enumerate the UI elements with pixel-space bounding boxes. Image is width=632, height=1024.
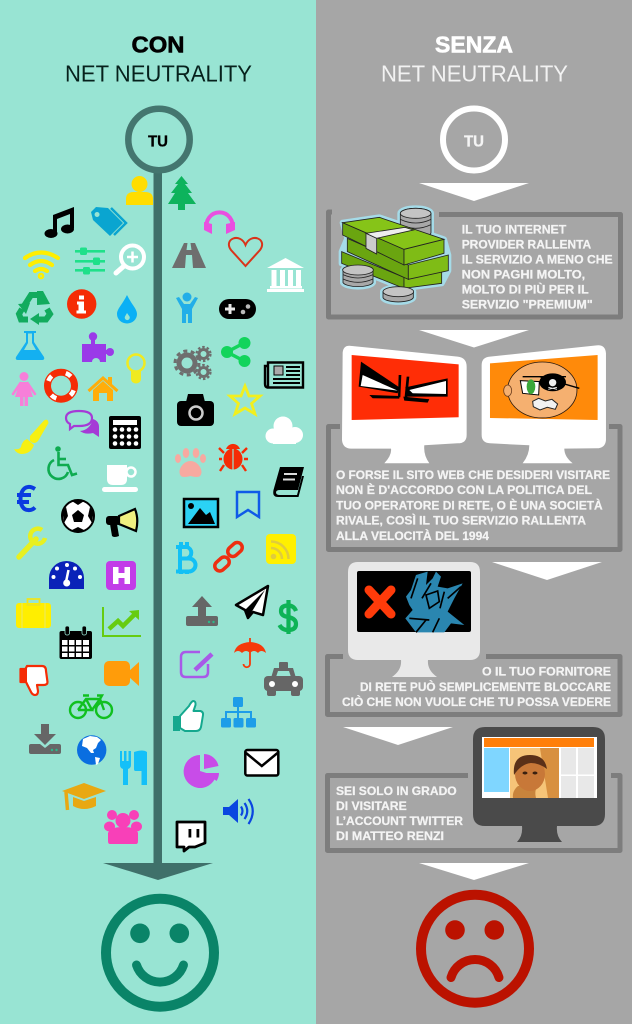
text: site disagrees: TUO OPERATORE DI RETE, O È UNA SOCIETÀ	[336, 497, 603, 512]
node: tu: TU	[464, 134, 484, 151]
arrow	[419, 863, 529, 880]
icon: flask	[16, 331, 44, 360]
icon: star	[230, 386, 260, 414]
icon: light bulb	[128, 354, 144, 384]
icon: lifebuoy	[44, 368, 78, 403]
icon: paintbrush	[14, 420, 48, 454]
text: matteo renzi: L’ACCOUNT TWITTER	[336, 814, 463, 828]
text: premium service: SERVIZIO "PREMIUM"	[462, 297, 593, 311]
icon: speaker	[223, 799, 253, 824]
icon: soccer ball	[62, 500, 94, 533]
icon: bitcoin	[176, 542, 196, 574]
text: matteo renzi: DI MATTEO RENZI	[336, 829, 444, 843]
text: blocked content: CIÒ CHE NON VUOLE CHE TU POSSA VEDERE	[342, 694, 611, 709]
text: matteo renzi: SEI SOLO IN GRADO	[336, 784, 457, 798]
icon: cutlery	[120, 750, 147, 785]
text: matteo renzi: DI VISITARE	[336, 799, 407, 813]
icon: calendar	[60, 626, 92, 659]
icon: growth chart	[103, 607, 141, 636]
icon: thumbs up	[173, 701, 203, 731]
icon: thumbs down	[20, 666, 48, 695]
node: tu: TU	[148, 134, 168, 151]
icon: bookmark	[237, 492, 259, 517]
text: site disagrees	[336, 468, 610, 543]
text: premium service: IL SERVIZIO A MENO CHE	[462, 252, 613, 266]
icon: euro	[17, 487, 35, 510]
icon: smiley face	[106, 899, 214, 1007]
icon: newspaper	[265, 362, 303, 388]
icon: bicycle	[70, 696, 112, 718]
node: tu	[443, 108, 505, 170]
icon: bank	[267, 258, 304, 292]
text: blocked content: DI RETE PUÒ SEMPLICEMENTE BLOCCARE	[360, 679, 611, 694]
icon: recycle	[18, 291, 50, 325]
illustration: twitter monitor	[473, 727, 605, 842]
arrow	[419, 330, 529, 348]
card: blocked content	[328, 562, 620, 714]
icon: wrench	[19, 529, 45, 557]
icon: book	[273, 467, 304, 497]
icon: speed gauge	[49, 561, 84, 589]
arrow	[419, 183, 529, 201]
photo: face	[510, 748, 559, 798]
text: site disagrees: NON È D'ACCORDO CON LA POLITICA DEL	[336, 482, 592, 497]
icon: road	[172, 243, 206, 268]
text: blocked content: O IL TUO FORNITORE	[482, 665, 611, 679]
icon: envelope	[245, 750, 278, 776]
heading: net neutrality: NET NEUTRALITY	[381, 61, 568, 87]
icon: coffee cup	[102, 465, 138, 492]
icon: taxi	[264, 662, 303, 696]
icon: calculator	[109, 416, 141, 449]
icon: sad face	[421, 895, 529, 1003]
illustration: pirate ship	[405, 572, 464, 632]
arrow	[492, 562, 602, 580]
icon: wheelchair	[48, 446, 77, 479]
illustration: blocked site monitor	[348, 562, 480, 677]
icon: person arms up	[176, 292, 198, 323]
heading: con: CON	[132, 32, 184, 58]
illustration: money stacks	[342, 208, 448, 302]
icon: sitemap	[221, 697, 256, 728]
icon: camera	[177, 394, 214, 426]
icon: woman	[13, 372, 35, 406]
icon: search plus	[116, 246, 144, 273]
icon: tree	[168, 176, 196, 210]
icon: umbrella	[234, 638, 266, 667]
icon: twitch	[177, 822, 205, 851]
text: premium service: MOLTO DI PIÙ PER IL	[462, 281, 589, 296]
card: site disagrees	[328, 345, 620, 550]
icon: bug	[219, 444, 248, 471]
heading: net neutrality: NET NEUTRALITY	[65, 61, 252, 87]
icon: rss	[266, 534, 296, 564]
icon: edit	[181, 652, 212, 677]
icon: gamepad	[219, 299, 256, 319]
panel: con net neutrality	[0, 0, 316, 1024]
icon: people	[104, 810, 142, 844]
text: site disagrees: ALLA VELOCITÀ DEL 1994	[336, 528, 489, 543]
icon: upload	[186, 596, 218, 626]
illustration: angry monitor	[342, 346, 467, 463]
icon: headphones	[204, 212, 235, 234]
icon: gears	[175, 347, 210, 379]
icon: video camera	[104, 661, 139, 686]
icon: globe	[77, 735, 106, 765]
text: premium service: IL TUO INTERNET	[462, 222, 567, 236]
illustration: pirate monitor	[482, 345, 606, 463]
text: matteo renzi	[336, 784, 463, 843]
icon: image	[184, 499, 218, 527]
icon: music	[44, 207, 74, 238]
text: premium service	[462, 222, 613, 311]
icon: heart	[229, 238, 262, 266]
vertical timeline arrow	[103, 170, 213, 880]
icon: cloud	[266, 416, 303, 444]
text: premium service: NON PAGHI MOLTO,	[462, 267, 585, 281]
icon: sliders	[75, 248, 105, 274]
icon: hospital	[106, 561, 136, 590]
text: premium service: PROVIDER RALLENTA	[462, 238, 591, 252]
text: site disagrees: O FORSE IL SITO WEB CHE DESIDERI VISITARE	[336, 468, 610, 482]
heading: senza: SENZA	[435, 32, 513, 58]
card: premium service	[328, 208, 620, 317]
icon: megaphone	[106, 509, 137, 537]
icon: user	[126, 176, 153, 205]
icon: red cross	[369, 590, 391, 614]
panel: senza net neutrality	[316, 0, 632, 1024]
icon: wifi	[25, 252, 58, 277]
icon: share	[221, 337, 250, 367]
text: blocked content	[342, 665, 611, 709]
icon: paper plane	[236, 586, 268, 618]
icon: briefcase	[16, 599, 51, 628]
icon: graduation cap	[62, 783, 106, 810]
icon: water drop	[117, 295, 137, 324]
text: site disagrees: RIVALE, COSÌ IL TUO SERVIZIO RALLENTA	[336, 513, 586, 528]
node: tu	[128, 109, 190, 170]
icon: chat	[66, 411, 99, 437]
icon: dollar	[280, 600, 296, 634]
icon: house	[88, 377, 118, 401]
icon: puzzle	[82, 332, 114, 366]
icon: download	[29, 724, 61, 754]
card: matteo renzi	[328, 727, 620, 850]
icon: paw	[175, 448, 206, 477]
icon: info	[67, 289, 96, 319]
icon: chain link	[213, 540, 244, 573]
arrow	[343, 727, 453, 745]
icon: tags	[91, 207, 126, 236]
icon: pie chart	[184, 754, 219, 788]
